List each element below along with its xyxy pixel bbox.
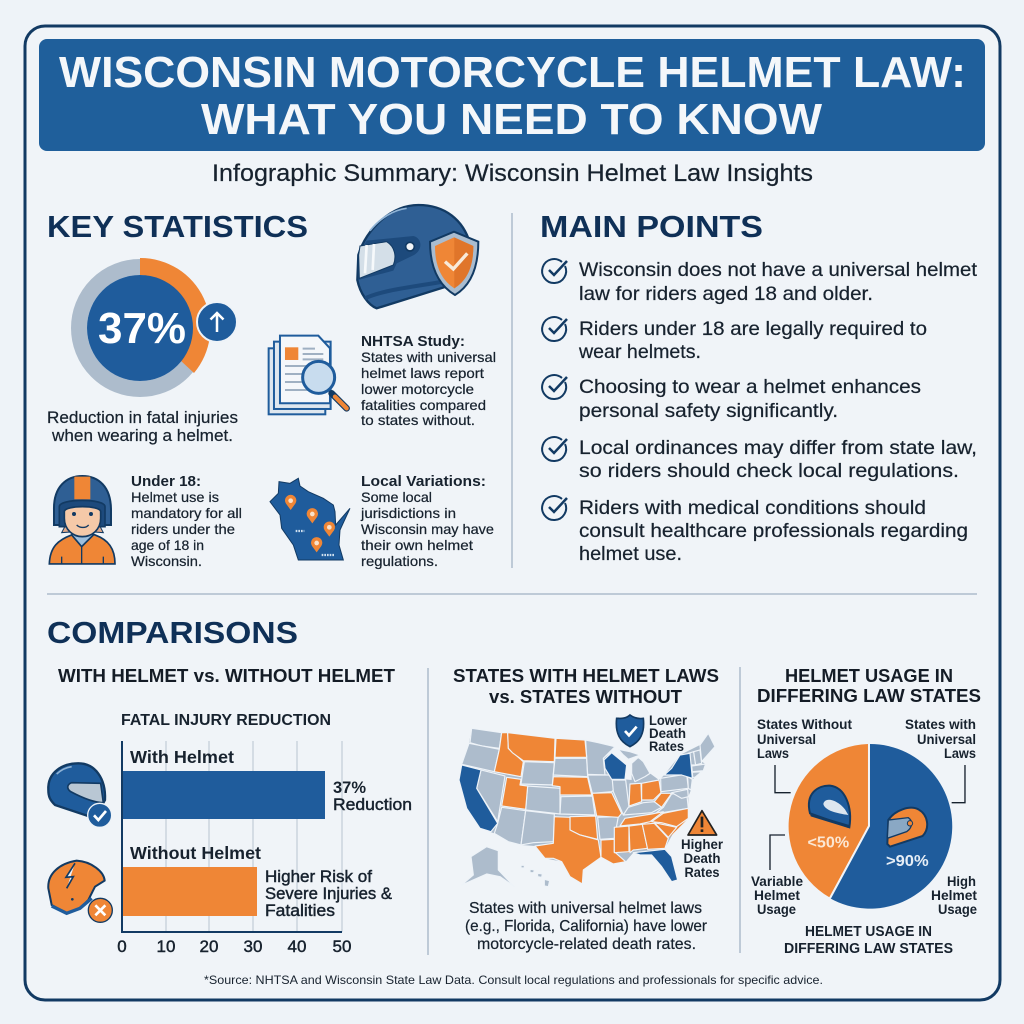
footer source note: *Source: NHTSA and Wisconsin State Law Data. Consult local regulations and professionals for specific advice. [204, 973, 823, 987]
panel heading: WITH HELMET vs. WITHOUT HELMET [58, 665, 396, 686]
text block: NHTSA study: to states without. [361, 412, 475, 428]
bar chart: 0 [117, 937, 127, 956]
donut caption [47, 408, 238, 445]
text block: under 18: riders under the [131, 521, 235, 537]
panel: states comparison [453, 665, 724, 953]
pie chart caption [784, 924, 953, 957]
text block: NHTSA study: lower motorcycle [361, 381, 474, 397]
heading: comparisons: COMPARISONS [47, 615, 298, 650]
bar chart: 40 [288, 937, 306, 956]
title banner [39, 39, 985, 151]
bar chart: With Helmet [130, 747, 234, 767]
bar chart: Severe Injuries & [265, 885, 392, 903]
point 4 [579, 437, 977, 482]
title banner: WISCONSIN MOTORCYCLE HELMET LAW: [59, 49, 966, 97]
text block: NHTSA study [361, 333, 496, 428]
label: states without universal laws: States Without [757, 717, 853, 732]
point 3: personal safety significantly. [579, 400, 838, 422]
text block: local variations: regulations. [361, 553, 438, 569]
label: states with universal laws: Laws [944, 746, 976, 761]
map caption: motorcycle-related death rates. [477, 936, 696, 953]
icon: document with magnifier [269, 336, 347, 414]
point 4: Local ordinances may differ from state law, [579, 437, 977, 459]
label: variable helmet usage: Usage [757, 902, 796, 917]
panel heading: vs. STATES WITHOUT [489, 686, 683, 707]
legend: higher death rates: Death [684, 851, 720, 866]
panel heading [453, 665, 719, 707]
pie chart [770, 744, 965, 909]
text block: under 18: Helmet use is [131, 489, 219, 505]
label: states with universal laws [905, 717, 976, 761]
label: variable helmet usage: Variable [751, 874, 803, 889]
icon: shield with check [616, 715, 644, 747]
donut chart: 37%: 37% [98, 304, 186, 353]
map caption: States with universal helmet laws [469, 900, 702, 917]
text block: NHTSA study: States with universal [361, 349, 496, 365]
check list icons [542, 259, 567, 520]
panel heading: HELMET USAGE IN [785, 665, 953, 686]
text block: NHTSA study: NHTSA Study: [361, 333, 465, 350]
panel: helmet usage [751, 665, 981, 957]
bar chart: 20 [200, 937, 218, 956]
point 5 [579, 497, 968, 565]
point 2: Riders under 18 are legally required to [579, 318, 927, 340]
legend: lower death rates [649, 713, 688, 754]
bar chart: 50 [333, 937, 351, 956]
icon: helmet with shield [357, 205, 478, 308]
text block: local variations: Wisconsin may have [361, 521, 494, 537]
text block: local variations: Local Variations: [361, 473, 486, 490]
text block: NHTSA study: helmet laws report [361, 365, 484, 381]
legend: lower death rates: Death [649, 726, 686, 741]
subtitle: Infographic Summary: Wisconsin Helmet Law Insights [212, 160, 813, 187]
legend: lower death rates: Rates [649, 739, 684, 754]
icon: warning triangle [688, 811, 717, 835]
label: states with universal laws: Universal [917, 732, 976, 747]
icon: cracked helmet [48, 861, 112, 922]
label: states without universal laws: Laws [757, 746, 789, 761]
label: states without universal laws: Universal [757, 732, 816, 747]
legend: higher death rates [681, 837, 724, 880]
point 1: Wisconsin does not have a universal helmet [579, 259, 978, 281]
point 1: law for riders aged 18 and older. [579, 283, 873, 305]
point 5: consult healthcare professionals regarding [579, 520, 968, 542]
label: variable helmet usage: Helmet [754, 888, 801, 903]
bar chart: 30 [244, 937, 262, 956]
text block: under 18: mandatory for all [131, 505, 242, 521]
pie chart caption: DIFFERING LAW STATES [784, 941, 953, 957]
map caption: (e.g., Florida, California) have lower [465, 918, 708, 935]
text block: NHTSA study: fatalities compared [361, 397, 486, 413]
bar chart: Without Helmet [130, 843, 261, 863]
text block: under 18: age of 18 in [131, 537, 204, 553]
label: variable helmet usage [751, 874, 803, 917]
panel heading: DIFFERING LAW STATES [757, 685, 981, 706]
heading: main points: MAIN POINTS [540, 209, 763, 244]
panel heading [757, 665, 981, 706]
panel heading: STATES WITH HELMET LAWS [453, 665, 719, 686]
point 5: Riders with medical conditions should [579, 497, 926, 519]
pie chart caption: HELMET USAGE IN [805, 924, 932, 940]
bar chart: Reduction [333, 795, 412, 814]
point 1 [579, 259, 978, 305]
panel: key statistics [47, 205, 496, 569]
text block: local variations: jurisdictions in [360, 505, 456, 521]
icon: intact helmet [48, 763, 112, 827]
icon: Wisconsin map with pins [270, 478, 350, 560]
point 2 [578, 318, 927, 363]
bar chart: 37% [333, 778, 366, 797]
pie chart: >90% [886, 853, 929, 870]
icon: young rider [49, 476, 115, 564]
label: high helmet usage: Helmet [931, 888, 978, 903]
donut caption: when wearing a helmet. [51, 426, 233, 445]
label: high helmet usage: High [947, 874, 976, 889]
pie chart: <50% [807, 834, 849, 851]
bar chart: Higher Risk of [265, 868, 372, 886]
label: states without universal laws [757, 717, 853, 761]
text block: under 18: Wisconsin. [131, 553, 202, 569]
bar chart [117, 741, 412, 956]
legend: lower death rates: Lower [649, 713, 688, 728]
text block: local variations [360, 473, 494, 569]
donut caption: Reduction in fatal injuries [47, 408, 238, 427]
bar chart: Fatalities [265, 902, 335, 920]
title banner: WHAT YOU NEED TO KNOW [201, 96, 823, 144]
bar chart: 10 [157, 937, 175, 956]
point 4: so riders should check local regulations. [579, 460, 959, 482]
point 2: wear helmets. [578, 341, 701, 363]
text block: local variations: their own helmet [361, 537, 473, 553]
legend: higher death rates: Higher [681, 837, 724, 852]
text block: local variations: Some local [361, 489, 432, 505]
text block: under 18 [131, 473, 242, 569]
label: high helmet usage: Usage [938, 902, 977, 917]
donut chart: 37% [79, 258, 237, 389]
US map [459, 728, 715, 887]
point 3: Choosing to wear a helmet enhances [579, 376, 921, 398]
label: high helmet usage [931, 874, 978, 917]
label: states with universal laws: States with [905, 717, 976, 732]
chart title: FATAL INJURY REDUCTION [121, 712, 331, 729]
point 3 [579, 376, 921, 422]
legend: higher death rates: Rates [684, 865, 720, 880]
heading: key statistics: KEY STATISTICS [47, 209, 308, 244]
panel: with vs without helmet [48, 665, 412, 956]
map caption [465, 900, 708, 953]
panel: main points [540, 209, 978, 565]
text block: under 18: Under 18: [131, 473, 201, 490]
point 5: helmet use. [579, 543, 682, 565]
